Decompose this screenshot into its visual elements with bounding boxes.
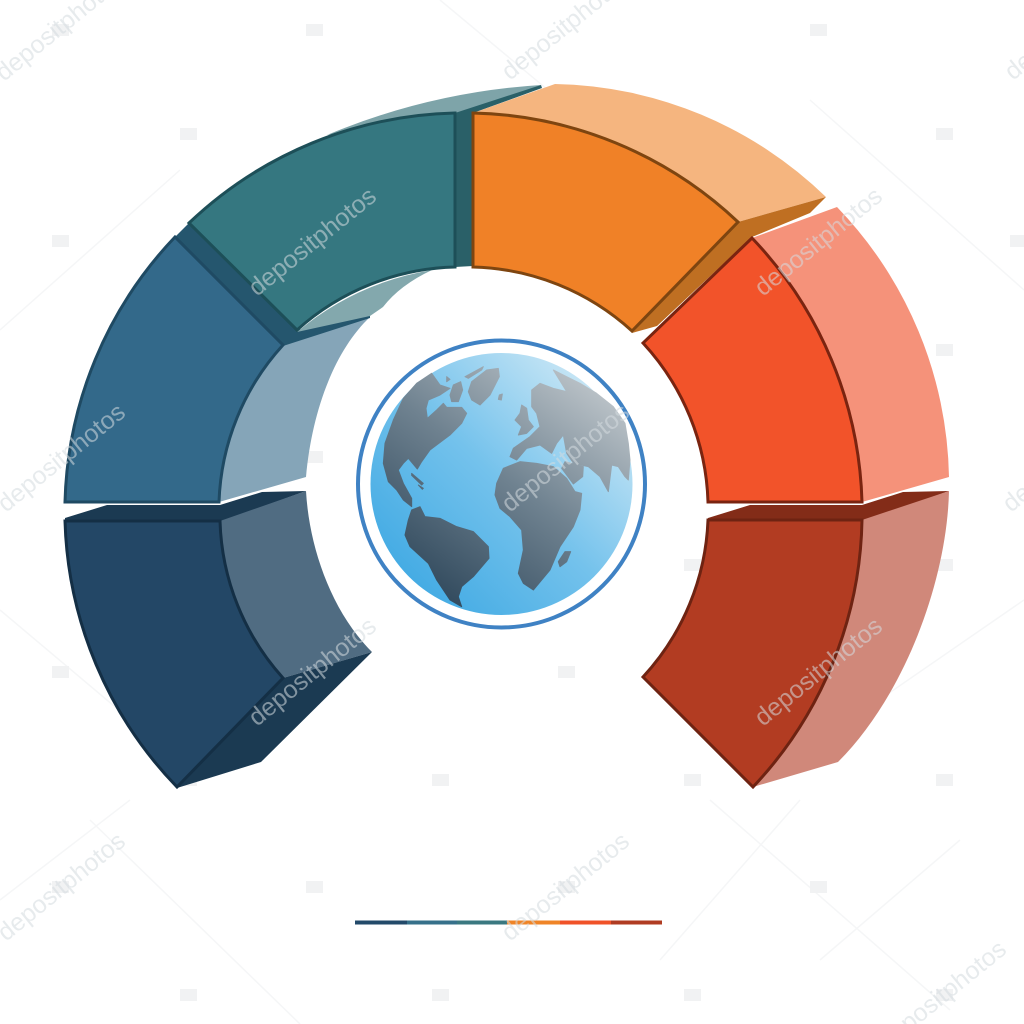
salmon outer side (752, 207, 949, 502)
teal top edge strip (455, 85, 542, 113)
mid blue inner wall (219, 317, 370, 502)
Arctic islands (447, 367, 502, 400)
dark red top gap face (708, 491, 949, 522)
segment: upper right orange (473, 84, 826, 333)
globe outer ring (358, 340, 645, 628)
gradient color legend bar (355, 920, 662, 924)
dark blue inner wall (220, 491, 372, 678)
Greenland (468, 368, 499, 405)
orange top side (473, 84, 826, 222)
Britain and Scandinavia islands (515, 405, 533, 435)
teal inner wall (297, 270, 432, 332)
stock watermarks: depositphotos (749, 182, 888, 302)
red-orange front face (643, 238, 862, 502)
globe icon (358, 340, 645, 628)
stock watermarks: depositphotos (496, 827, 635, 947)
orange end side (632, 197, 826, 333)
segment: lower left dark blue (65, 491, 372, 788)
North America (383, 373, 467, 507)
stock watermarks: depositphotos (496, 398, 635, 518)
Africa (495, 462, 582, 590)
teal top side (327, 85, 541, 135)
dark blue bottom face (177, 652, 372, 788)
segment: right red-orange (643, 207, 949, 502)
teal gap side (455, 113, 473, 267)
stock watermarks: depositphotos (243, 182, 382, 302)
globe ocean (370, 353, 632, 615)
segmented 3D ring (65, 84, 949, 788)
teal front face (189, 113, 455, 330)
dark blue front face (65, 521, 283, 787)
Madagascar (558, 552, 571, 567)
South America (405, 507, 489, 607)
dark red outer side (753, 491, 949, 787)
Caribbean islands (412, 473, 423, 489)
orange front face (473, 113, 738, 331)
mid blue front face (65, 237, 283, 502)
stock watermarks: depositphotos (243, 612, 382, 732)
segment: left mid blue (65, 223, 370, 502)
Arabia (562, 462, 583, 484)
stock watermarks: depositphotos (749, 612, 888, 732)
mid blue top wedge (175, 223, 370, 346)
dark red front face (643, 520, 862, 787)
Eurasia (510, 370, 630, 492)
segment: lower right dark red (643, 491, 949, 787)
globe continents (383, 367, 630, 607)
Baffin Island (450, 382, 463, 402)
dark blue top gap face (65, 491, 306, 522)
segment: upper left teal (189, 85, 542, 332)
